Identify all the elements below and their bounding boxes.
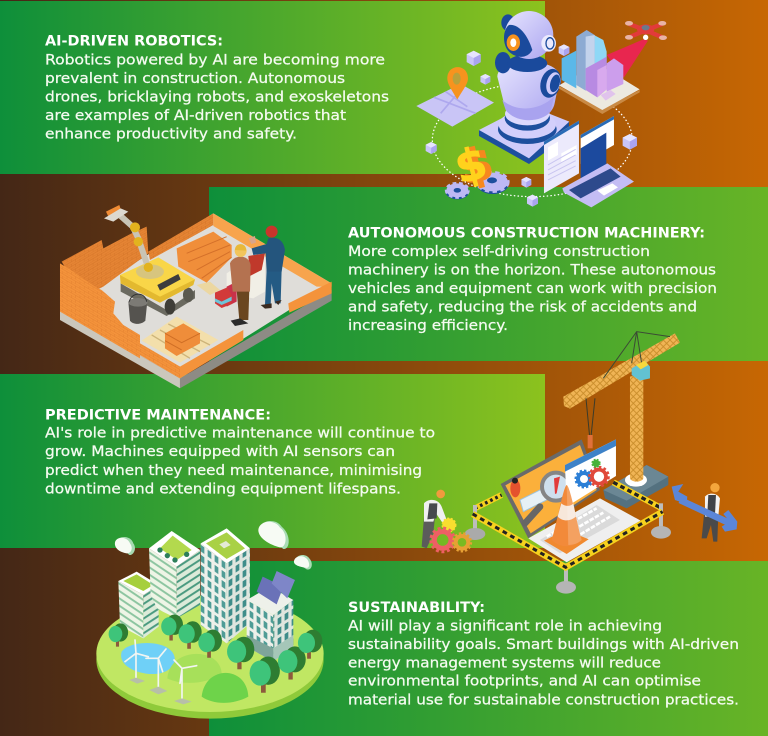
text block: AI-driven robotics: enhance productivity and safety. <box>45 126 297 142</box>
icon: dollar sign: $ <box>450 137 492 194</box>
icon: gears <box>446 173 509 199</box>
laptop <box>501 439 641 562</box>
text block: sustainability: SUSTAINABILITY: <box>348 600 485 616</box>
illustration: brick site with robot and workers <box>60 205 332 388</box>
wind turbines <box>125 640 197 704</box>
text block: sustainability: AI will play a significant role in achieving <box>348 619 662 635</box>
panel: predictive maintenance band <box>0 374 545 548</box>
text block: predictive maintenance: grow. Machines equipped with AI sensors can <box>45 444 395 460</box>
text block: autonomous construction machinery: vehicles and equipment can work with precision <box>348 281 717 297</box>
text block: autonomous construction machinery: and safety, reducing the risk of accidents and <box>348 300 697 316</box>
brick walls front <box>60 263 332 378</box>
text block: predictive maintenance: AI's role in predictive maintenance will continue to <box>45 426 435 442</box>
robot base <box>479 103 569 164</box>
text block: sustainability <box>348 600 739 708</box>
hills <box>167 654 248 703</box>
platform <box>60 213 332 388</box>
text block: autonomous construction machinery: More complex self-driving construction <box>348 244 650 260</box>
worker in brown jacket <box>230 244 251 326</box>
panel: sustainability band <box>209 561 768 736</box>
text block: AI-driven robotics: are examples of AI-driven robotics that <box>45 108 347 124</box>
building C <box>201 528 250 643</box>
icon: red drone <box>625 21 667 40</box>
disc <box>96 595 324 719</box>
text block: predictive maintenance: downtime and extending equipment lifespans. <box>45 481 401 497</box>
text block: AI-driven robotics: drones, bricklaying robots, and exoskeletons <box>45 90 389 106</box>
text block: autonomous construction machinery <box>348 226 717 334</box>
pallet with bricks <box>142 317 218 363</box>
text block: predictive maintenance: predict when they need maintenance, minimising <box>45 463 422 479</box>
paint cans and boxes <box>215 253 265 308</box>
illustration: green city on a disc <box>96 521 324 719</box>
icon: city on platform <box>559 30 640 114</box>
text block: sustainability: environmental footprints, and AI can optimise <box>348 674 701 690</box>
worker in blue overalls <box>249 226 285 309</box>
tape back <box>475 482 662 508</box>
crane <box>563 332 680 508</box>
text block: autonomous construction machinery: increasing efficiency. <box>348 318 508 334</box>
illustration: crane, laptop and workers <box>422 332 737 594</box>
text block: predictive maintenance: PREDICTIVE MAINTENANCE: <box>45 407 271 423</box>
clouds <box>115 521 312 570</box>
icon: browser windows and laptop <box>544 116 634 207</box>
trees <box>109 614 322 693</box>
text block: AI-driven robotics: Robotics powered by AI are becoming more <box>45 52 385 68</box>
robotic arm vehicle <box>104 205 195 316</box>
text block: sustainability: material use for sustainable construction practices. <box>348 692 739 708</box>
worker with wrench <box>672 483 737 542</box>
text block: sustainability: sustainability goals. Smart buildings with AI-driven <box>348 637 739 653</box>
text block: sustainability: energy management systems will reduce <box>348 655 661 671</box>
drone scanning beam <box>607 39 648 77</box>
traffic cone <box>544 485 589 554</box>
text block: autonomous construction machinery: machinery is on the horizon. These autonomous <box>348 262 716 278</box>
brick stack on pallet <box>177 232 232 295</box>
building A <box>118 572 159 638</box>
icon: dollar sign: $ <box>456 138 498 195</box>
illustration: robot with city, drone and laptop <box>416 11 667 207</box>
text block: predictive maintenance <box>45 407 435 497</box>
panel: autonomous machinery band <box>209 187 768 361</box>
robot body and head <box>495 11 564 120</box>
text block: autonomous construction machinery: AUTONOMOUS CONSTRUCTION MACHINERY: <box>348 226 705 242</box>
text block: AI-driven robotics: AI-DRIVEN ROBOTICS: <box>45 34 223 50</box>
building D with solar panels <box>247 571 295 662</box>
panel: AI-driven robotics band <box>0 1 545 174</box>
bucket <box>128 294 148 324</box>
pond <box>121 643 175 674</box>
text block: AI-driven robotics: prevalent in construction. Autonomous <box>45 71 345 87</box>
text block: AI-driven robotics <box>45 34 389 143</box>
icon: map with location pin <box>416 67 494 127</box>
window with gears <box>565 439 616 507</box>
tape front and posts <box>465 503 671 594</box>
worker with gears <box>422 490 471 552</box>
brick walls back <box>62 213 332 290</box>
building B <box>149 531 200 618</box>
